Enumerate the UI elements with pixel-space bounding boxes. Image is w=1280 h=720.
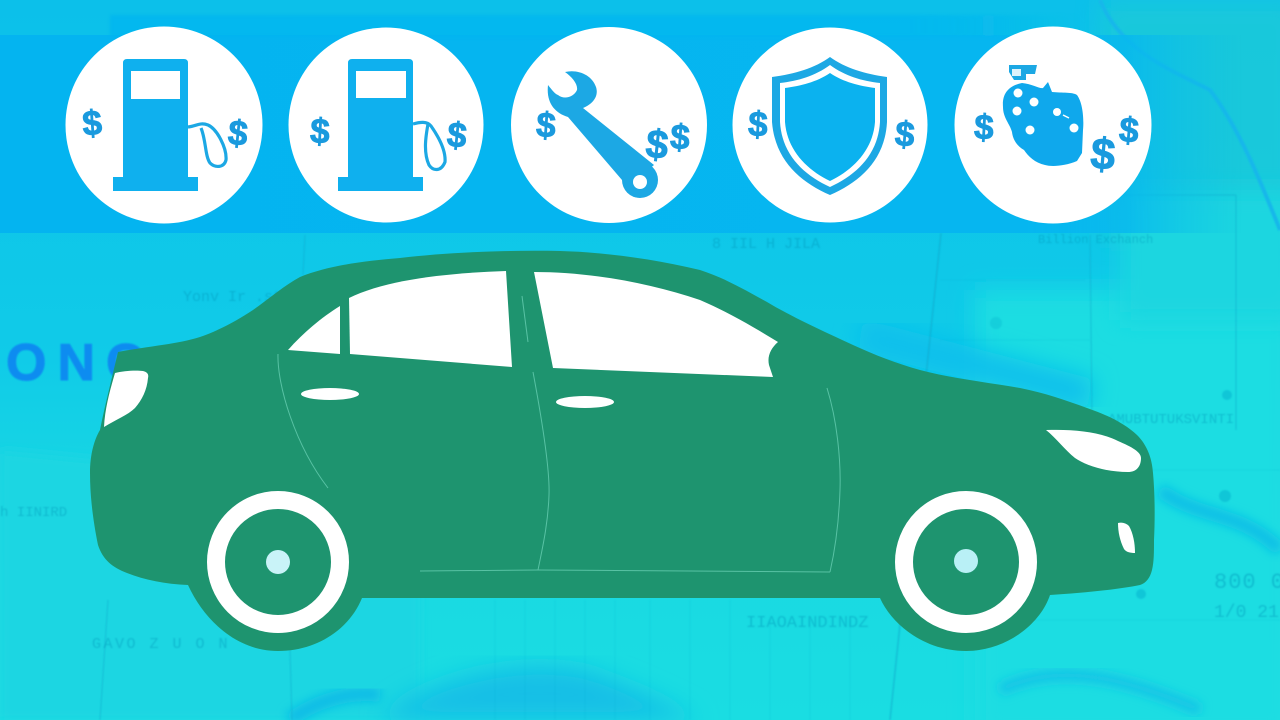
icon: map with pins (954, 26, 1152, 224)
icon: wrench (511, 27, 707, 223)
rear quarter window (288, 306, 340, 354)
icon: shield (732, 28, 928, 222)
icon: wrench: $ (535, 105, 557, 146)
icon: fuel pump, first: $ (81, 103, 103, 144)
faint map labels: 1/0 21 (1214, 603, 1279, 623)
front marker light (1118, 523, 1135, 553)
faint map labels (0, 233, 1280, 653)
rear door handle (301, 388, 359, 400)
faint map labels: 8 IIL H JILA (712, 236, 820, 253)
icon: map with pins: $ (1089, 129, 1117, 180)
icon: fuel pump, second: $ (445, 115, 469, 156)
rear wheel (216, 500, 340, 624)
front door window (534, 272, 778, 377)
door seams (278, 296, 840, 572)
car illustration (90, 251, 1155, 651)
faint map labels: GAVO Z U O N (92, 636, 230, 653)
icon: shield: $ (747, 105, 769, 144)
icon: fuel pump, first: $ (226, 113, 250, 154)
faint map labels: Yonv Ir .st (183, 289, 282, 306)
icon: fuel pump, second: $ (309, 112, 331, 151)
faint map labels: AMUBTUTUKSVINTI (1108, 412, 1234, 428)
icon: wrench: $ (669, 117, 691, 158)
headlight (1046, 430, 1141, 472)
icon: wrench: $ (644, 122, 670, 168)
map label: ONO: ONO (6, 334, 157, 392)
faint map labels: h IINIRD (0, 505, 67, 521)
tail light (104, 371, 148, 427)
icon: fuel pump, first (66, 26, 262, 224)
faint map labels: IIAOAINDINDZ (746, 614, 868, 633)
faint map labels: Billion Exchanch (1038, 233, 1153, 247)
front door handle (556, 396, 614, 408)
icon: shield: $ (893, 114, 916, 155)
icon: map with pins: $ (1118, 110, 1140, 151)
front wheel (904, 500, 1028, 624)
icon: fuel pump, second (288, 28, 484, 222)
top blue band (0, 15, 1280, 233)
car body silhouette (90, 251, 1155, 651)
rear door window (349, 271, 512, 367)
icon: map with pins: $ (973, 108, 995, 147)
